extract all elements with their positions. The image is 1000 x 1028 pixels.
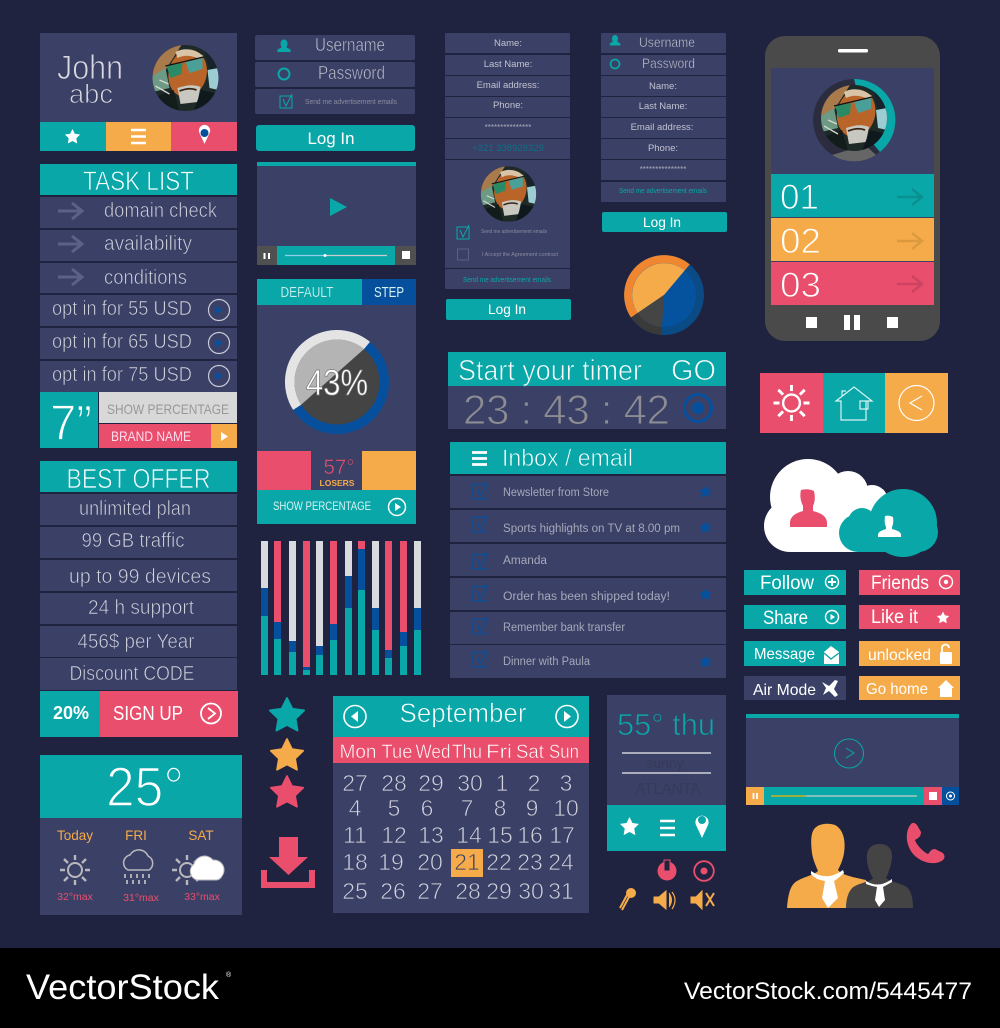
panel: login form	[255, 35, 415, 151]
panel: task list: availability	[104, 233, 192, 255]
icon: download	[261, 837, 315, 888]
calendar days: 10	[553, 795, 579, 821]
calendar days: 8	[494, 795, 506, 821]
panel: city weather: ATLANTA	[636, 781, 701, 798]
panel: registration form: Email address:	[477, 80, 539, 91]
action buttons: Like it	[871, 607, 919, 628]
panel: percentage gauge: SHOW PERCENTAGE	[273, 499, 371, 513]
panel: weather forecast: 32°max	[57, 891, 94, 903]
footer bar: ®	[226, 971, 232, 979]
weekday labels: Fri	[486, 742, 512, 763]
calendar days: 1	[496, 770, 508, 796]
panel: task list: TASK LIST	[83, 166, 194, 196]
calendar days: 29	[418, 770, 444, 796]
panel: inbox: Sports highlights on TV at 8.00 pm	[503, 523, 680, 535]
panel: inbox	[450, 442, 726, 678]
action buttons: Friends	[871, 573, 929, 594]
panel: best offer: unlimited plan	[79, 498, 191, 520]
action buttons: unlocked	[868, 647, 931, 664]
panel: best offer: 456$ per Year	[78, 631, 195, 653]
panel: calendar	[333, 696, 589, 913]
calendar days: 9	[526, 795, 538, 821]
weather icons	[60, 850, 224, 885]
panel: task list: opt in for 75 USD	[52, 364, 192, 386]
profile name	[57, 49, 123, 109]
panel: best offer: Discount CODE	[70, 663, 194, 685]
donut gauge: 43%	[306, 362, 368, 403]
calendar days: 20	[417, 849, 443, 875]
log in button	[256, 125, 415, 151]
panel: timer: Start your timer	[458, 355, 642, 387]
calendar days: 30	[518, 878, 544, 904]
panel: best offer	[40, 461, 238, 737]
calendar days: 3	[560, 770, 572, 796]
action buttons	[744, 570, 960, 700]
panel: weather forecast: SAT	[188, 828, 214, 843]
calendar days: 23	[517, 849, 543, 875]
weekday labels: Mon	[340, 742, 376, 763]
calendar days: 19	[378, 849, 404, 875]
panel: best offer: 99 GB traffic	[82, 530, 184, 552]
action buttons: Follow	[760, 573, 814, 594]
phone avatar	[813, 79, 895, 161]
panel: inbox: Inbox / email	[502, 445, 633, 472]
weekday labels: Tue	[382, 742, 412, 763]
calendar days: 5	[388, 795, 400, 821]
profile name: John	[57, 49, 123, 87]
screen size tile: BRAND NAME	[111, 428, 191, 444]
calendar days: 4	[349, 795, 362, 821]
panel: registration form: +321 338928329	[472, 143, 544, 154]
log in button: Log In	[488, 301, 526, 317]
panel: signup form: Username	[639, 34, 695, 50]
icon: telephone	[907, 823, 944, 863]
button icons	[824, 576, 952, 664]
today highlight	[451, 849, 483, 877]
sign up bar	[40, 691, 238, 737]
phone controls	[806, 315, 898, 330]
action buttons: Go home	[866, 681, 928, 698]
calendar days: 26	[380, 878, 406, 904]
panel: percentage gauge: STEP	[374, 284, 404, 301]
panel: task list: conditions	[104, 267, 187, 289]
calendar days: 25	[342, 878, 368, 904]
panel: login form: Username	[315, 35, 385, 55]
panel: city weather	[607, 695, 726, 851]
panel: city weather: sunny	[646, 755, 684, 771]
phone mockup	[765, 36, 940, 341]
log in button: Log In	[643, 214, 681, 230]
panel: video player two	[746, 714, 959, 805]
calendar days: 27	[342, 770, 368, 796]
calendar days: 14	[456, 822, 482, 848]
calendar days: 15	[487, 822, 513, 848]
calendar days: 12	[381, 822, 407, 848]
phone menu: 01	[780, 178, 819, 217]
calendar days: 6	[421, 795, 433, 821]
panel: weather forecast: 31°max	[123, 892, 160, 904]
phone menu	[771, 174, 934, 305]
calendar days: 28	[455, 878, 481, 904]
profile photo	[152, 45, 218, 111]
profile action bar	[40, 122, 237, 151]
month arrows	[344, 706, 578, 728]
panel: registration form: Phone:	[493, 100, 523, 111]
panel: signup form: Send me advertisement emails	[619, 188, 707, 195]
panel: signup form: Email address:	[631, 122, 693, 133]
panel: inbox: Newsletter from Store	[503, 487, 609, 499]
panel: signup form: Phone:	[648, 143, 678, 154]
panel: registration form: I Accept the Agreement contract	[482, 252, 559, 258]
panel: registration form: Send me advertisement emails	[481, 229, 547, 235]
panel: weather forecast: Today	[57, 828, 93, 843]
icon: sun	[774, 385, 810, 421]
pie chart	[624, 255, 704, 335]
sign up bar: 20%	[53, 703, 89, 723]
cloud icons	[764, 459, 938, 557]
panel: weather forecast: 33°max	[184, 891, 221, 903]
screen size tile	[40, 392, 237, 451]
weekday labels: Wed	[416, 742, 450, 763]
panel: percentage gauge: LOSERS	[320, 478, 355, 488]
calendar days: 18	[342, 849, 368, 875]
footer bar	[0, 948, 1000, 1028]
panel: registration form: ***************	[485, 123, 531, 132]
icon: back	[899, 386, 934, 420]
calendar days: 29	[486, 878, 512, 904]
calendar days: 16	[517, 822, 543, 848]
panel: registration form: Name:	[494, 38, 522, 49]
panel: inbox: Amanda	[503, 555, 548, 567]
screen size tile: SHOW PERCENTAGE	[107, 401, 229, 417]
weekday labels: Thu	[452, 742, 482, 763]
panel: inbox: Dinner with Paula	[503, 656, 591, 668]
panel: weather forecast: FRI	[125, 828, 147, 843]
calendar days: 28	[381, 770, 407, 796]
form photo	[481, 166, 536, 222]
panel: timer: 23 : 43 : 42	[463, 386, 670, 433]
panel: task list	[40, 164, 237, 451]
panel: video player	[257, 162, 416, 265]
phone menu: 03	[780, 266, 821, 305]
panel: calendar: September	[400, 698, 527, 728]
panel: inbox: Order has been shipped today!	[503, 591, 670, 603]
panel: percentage gauge: 57°	[324, 456, 354, 479]
footer bar: VectorStock	[26, 968, 220, 1007]
calendar days: 2	[528, 770, 540, 796]
donut gauge	[285, 330, 389, 434]
panel: task list: opt in for 55 USD	[52, 298, 192, 320]
panel: percentage gauge	[257, 279, 416, 524]
calendar days: 7	[461, 795, 473, 821]
calendar days: 17	[549, 822, 575, 848]
icon tiles	[760, 373, 948, 433]
action buttons: Share	[763, 608, 808, 629]
weekday labels: Sun	[549, 742, 579, 763]
calendar days: 24	[548, 849, 574, 875]
panel: best offer: up to 99 devices	[69, 566, 211, 588]
panel: task list: domain check	[104, 200, 218, 222]
panel: login form: Send me advertisement emails	[305, 99, 397, 106]
log in button: Log In	[308, 129, 354, 148]
panel: task list: opt in for 65 USD	[52, 331, 192, 353]
action buttons: Message	[754, 646, 815, 663]
calendar days	[342, 770, 579, 904]
calendar days: 21	[454, 849, 480, 875]
panel: inbox: Remember bank transfer	[503, 622, 625, 634]
media icons	[620, 860, 714, 910]
weekday labels: Sat	[516, 742, 545, 763]
panel: timer	[448, 352, 726, 433]
panel: percentage gauge: DEFAULT	[280, 284, 334, 301]
icon: house	[836, 387, 872, 420]
panel: signup form	[601, 33, 727, 232]
panel: login form: Password	[318, 63, 385, 83]
weekday labels	[340, 742, 579, 763]
profile name: abc	[69, 79, 113, 109]
panel: profile card	[40, 33, 237, 151]
panel: timer: GO	[671, 355, 716, 387]
people icon	[787, 824, 913, 908]
panel: signup form: Password	[642, 55, 695, 71]
calendar days: 27	[417, 878, 443, 904]
phone menu: 02	[780, 222, 821, 261]
sign up bar: SIGN UP	[113, 703, 183, 725]
calendar days: 30	[457, 770, 483, 796]
panel: city weather: 55° thu	[617, 707, 715, 742]
screen size tile: 7”	[50, 395, 92, 451]
star icons	[270, 698, 304, 807]
panel: registration form: Send me advertisement emails	[463, 277, 551, 284]
panel: registration form	[445, 33, 571, 320]
panel: signup form: ***************	[640, 165, 686, 174]
log in button	[446, 299, 571, 320]
panel: registration form: Last Name:	[484, 59, 532, 70]
calendar days: 31	[548, 878, 574, 904]
footer bar: VectorStock.com/5445477	[684, 978, 972, 1005]
calendar days: 22	[486, 849, 512, 875]
action buttons: Air Mode	[753, 682, 816, 699]
panel: weather forecast	[40, 755, 242, 915]
panel: best offer: BEST OFFER	[66, 463, 210, 494]
calendar days: 13	[418, 822, 444, 848]
panel: weather forecast: 25°	[106, 755, 184, 818]
panel: signup form: Name:	[649, 81, 677, 92]
panel: best offer: 24 h support	[88, 597, 194, 619]
calendar days: 11	[343, 822, 367, 848]
panel: signup form: Last Name:	[639, 101, 687, 112]
log in button	[602, 212, 727, 232]
bar chart	[261, 541, 421, 675]
